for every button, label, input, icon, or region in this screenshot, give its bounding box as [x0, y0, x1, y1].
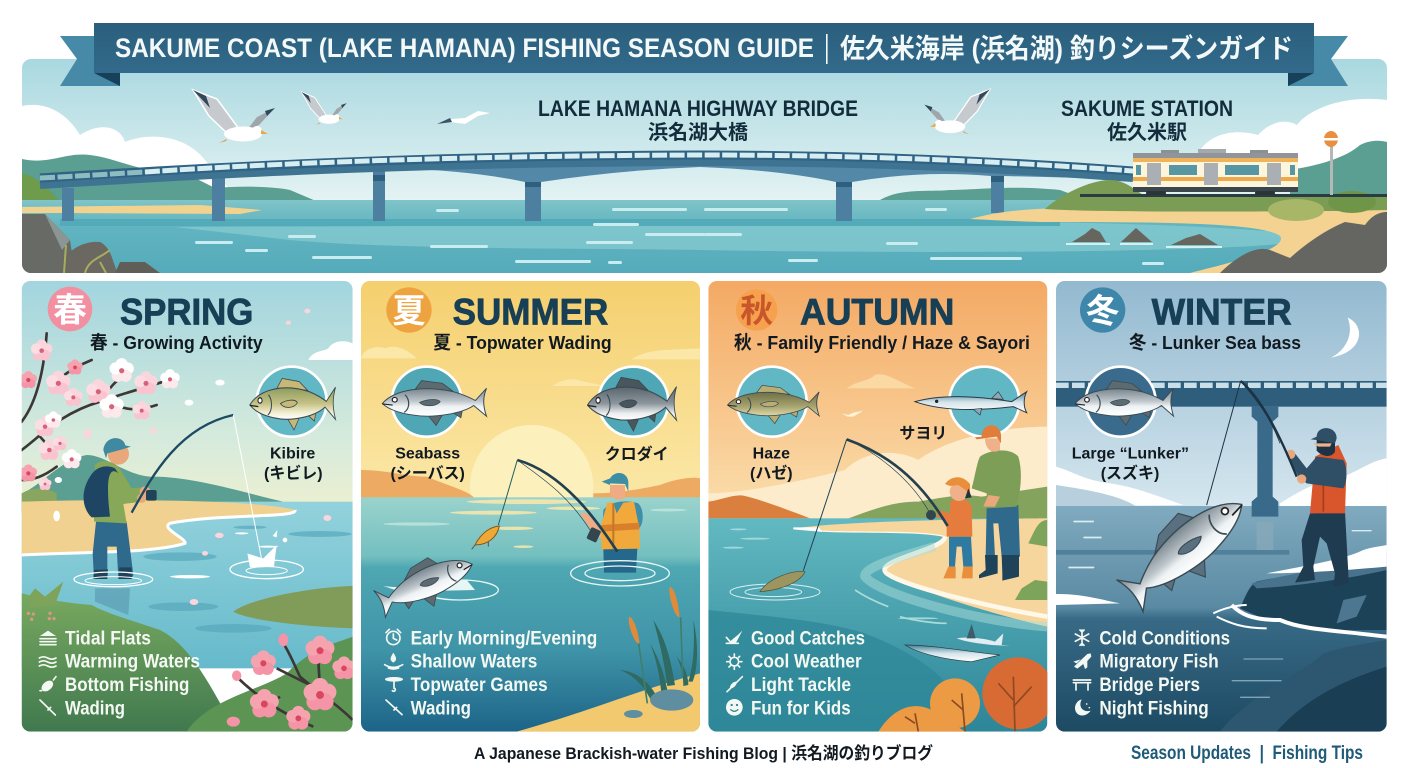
icon: good catches [726, 631, 742, 644]
right hill [1290, 141, 1387, 200]
feature list: spring: Warming Waters [65, 652, 200, 673]
feature list: winter: Migratory Fish [1099, 652, 1219, 673]
bridge [40, 155, 1133, 221]
seagulls [193, 89, 990, 143]
icon: cherry branch top-left [20, 333, 180, 490]
panel: autumn [708, 281, 1054, 732]
icon: sun [727, 654, 742, 669]
beach right [970, 208, 1387, 273]
fish badge: Sayori [915, 367, 1027, 437]
fish labels: autumn [750, 424, 947, 482]
title banner: 佐久米海岸 (浜名湖) 釣りシーズンガイド [840, 33, 1293, 64]
season badge: winter [1080, 287, 1125, 333]
fish label: Large Lunker: (スズキ) [1101, 463, 1159, 482]
hooked lunker sea bass [1109, 478, 1262, 622]
feature list: spring [39, 628, 200, 719]
fish labels: summer: (シーバス) [390, 465, 465, 482]
vegetation strip [1045, 180, 1387, 212]
heading: autumn: AUTUMN [800, 290, 954, 332]
feature list: spring: Tidal Flats [65, 628, 151, 649]
fish labels: autumn: Haze [753, 445, 790, 462]
feature list: summer: Wading [411, 698, 471, 719]
icon: warming waters [39, 657, 56, 667]
label: Lake Hamana Highway Bridge: LAKE HAMANA HIGHWAY BRIDGE [538, 96, 858, 121]
title banner [60, 23, 1348, 86]
sun [470, 425, 594, 498]
subheading: autumn: 秋 - Family Friendly / Haze & Sayori [734, 332, 1030, 353]
season badge: summer: 夏 [392, 294, 426, 331]
title text: SAKUME COAST (LAKE HAMANA) FISHING SEASON GUIDE [115, 33, 814, 63]
feature list: spring: Bottom Fishing [65, 675, 189, 696]
fish label: Kibire [264, 445, 323, 482]
icon: tidal flats [40, 631, 56, 645]
label: Lake Hamana Highway Bridge: 浜名湖大橋 [648, 121, 748, 144]
left sand [22, 205, 262, 214]
panel: spring [20, 281, 356, 732]
feature list: winter [1073, 628, 1230, 719]
fish label: Kibire: (キビレ) [264, 463, 323, 482]
autumn bushes [878, 657, 1054, 732]
angler: spring wader [74, 415, 262, 615]
subheading: winter: 冬 - Lunker Sea bass [1129, 332, 1301, 353]
splash [230, 530, 303, 579]
heading: winter: WINTER [1152, 290, 1292, 332]
feature list: autumn: Light Tackle [751, 675, 851, 696]
water [22, 200, 1387, 273]
icon: rod [386, 700, 402, 715]
feature list: summer [385, 628, 597, 719]
feature list: autumn: Fun for Kids [751, 698, 851, 719]
fish labels: summer [390, 444, 669, 482]
water highlights [195, 208, 1164, 265]
panel: hero scene with bridge and station [22, 59, 1387, 273]
winter bridge [1056, 381, 1387, 550]
angler: winter [1207, 381, 1348, 587]
icon: clock [386, 629, 401, 645]
hooked haze [730, 571, 820, 600]
right cloud [1201, 98, 1387, 168]
left hills [22, 155, 316, 201]
left cloud [22, 105, 230, 190]
crescent moon [1331, 318, 1359, 358]
icon: bottom fishing [39, 677, 56, 694]
icon: station sign [1324, 131, 1338, 195]
fish badge: Kurodai [587, 367, 677, 437]
lure [472, 526, 499, 549]
season badge: autumn: 秋 [740, 292, 773, 329]
icon: snowflake [1075, 630, 1089, 645]
snow clouds [1056, 467, 1183, 507]
feature list: spring: Wading [65, 698, 125, 719]
icon: water drop [385, 653, 403, 669]
icon: smile [726, 699, 743, 716]
subheading: spring: 春 - Growing Activity [90, 332, 263, 353]
angler: summer wader [498, 460, 669, 586]
leaping seabass [370, 542, 498, 626]
heading: summer: SUMMER [453, 290, 608, 332]
falling petals [53, 309, 331, 605]
icon: night moon [1075, 699, 1091, 715]
panel: winter [1056, 281, 1387, 732]
feature list: winter: Cold Conditions [1099, 628, 1230, 649]
fish label: Kibire: Kibire [270, 445, 315, 462]
angler: father [972, 425, 1021, 581]
fish labels: summer: クロダイ [605, 444, 669, 463]
distant right hills [880, 188, 1068, 200]
rocks in water [1066, 228, 1222, 248]
label: Sakume Station [1061, 96, 1233, 144]
season badge: winter: 冬 [1086, 294, 1119, 331]
icon: migratory plane [1073, 653, 1091, 669]
footer: blog credit: A Japanese Brackish-water Fishing Blog | 浜名湖の釣りブログ [474, 743, 933, 763]
fish label: Large Lunker [1072, 445, 1189, 482]
feature list: summer: Shallow Waters [411, 652, 537, 673]
feature list: summer: Topwater Games [411, 675, 548, 696]
fish labels: autumn: サヨリ [899, 424, 947, 442]
label: Sakume Station: SAKUME STATION [1061, 96, 1233, 121]
icon: light tackle [727, 677, 742, 692]
icon: cherry branch bottom-right [227, 634, 356, 730]
panel: summer [361, 281, 700, 732]
icon: topwater lure [385, 677, 403, 691]
rocks right [1220, 212, 1387, 273]
label: Sakume Station: 佐久米駅 [1107, 121, 1187, 144]
rocks left [22, 214, 160, 273]
heading: spring: SPRING [120, 290, 253, 332]
angler: child [803, 439, 973, 578]
feature list: autumn: Good Catches [751, 628, 865, 649]
bridge piers [62, 170, 1004, 221]
fish badge: Seabass [382, 367, 486, 437]
season badge: summer [386, 287, 432, 333]
feature list: winter: Bridge Piers [1099, 675, 1200, 696]
swimming sayori [905, 624, 1010, 662]
fish labels: autumn: (ハゼ) [750, 463, 793, 482]
icon: bridge pier [1073, 680, 1091, 690]
feature list: autumn: Cool Weather [751, 652, 862, 673]
rocks and foam [1213, 545, 1387, 732]
icon: wading rod [40, 700, 55, 715]
fish label: Large Lunker: Large “Lunker” [1072, 445, 1189, 462]
fish labels: summer: Seabass [395, 445, 460, 462]
subheading: summer: 夏 - Topwater Wading [433, 332, 612, 353]
icon: train [1133, 149, 1298, 195]
fish badge: Haze [728, 367, 819, 437]
feature list: autumn [726, 628, 865, 719]
fish badge: Kibire [250, 367, 336, 437]
label: Lake Hamana Highway Bridge [538, 96, 858, 144]
season badge: spring: 春 [53, 293, 87, 330]
feature list: winter: Night Fishing [1099, 698, 1209, 719]
feature list: summer: Early Morning/Evening [411, 628, 597, 649]
fish badge: Large Lunker [1075, 367, 1174, 437]
sand and reeds [517, 587, 700, 732]
season badge: spring [48, 287, 92, 331]
